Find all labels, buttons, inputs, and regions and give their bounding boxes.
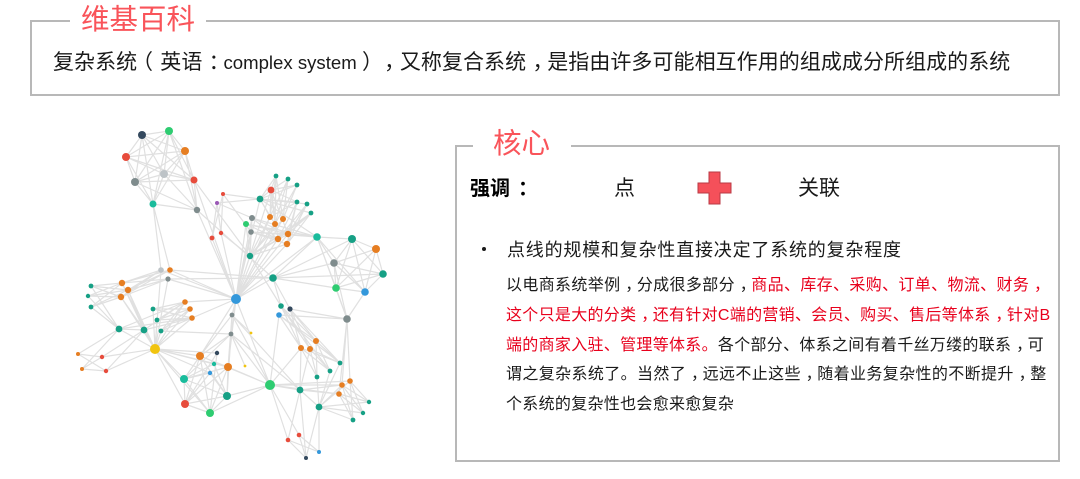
emphasis label: 强调 [470,178,510,200]
definition text: ） [362,51,383,74]
paragraph: e-commerce example: ， [740,277,756,294]
bullet [482,247,486,251]
paragraph: e-commerce example: 以电商系统举例 分成很多部分 商品、库存、采购、订单、物流、财务 [506,277,1029,294]
nodes: left cluster [76,267,195,373]
paragraph: e-commerce example: ， [1034,277,1050,294]
key point: 点线的规模和复杂性直接决定了系统的复杂程度 [507,240,902,260]
paragraph: e-commerce example: ， [806,366,822,383]
nodes: right cluster [313,233,387,323]
definition text: 复杂系统 英语 complex system 又称复合系统 是指由许多可能相互作用的组成成分所组成的系统 [53,51,1010,74]
definition text: ： [209,51,230,74]
definition text: ， [532,51,554,74]
panel: core [455,145,1060,462]
paragraph: e-commerce example: 个系统的复杂性也会愈来愈复杂 [506,396,734,413]
emphasis label [470,178,538,200]
label: relation: 关联 [798,177,840,200]
paragraph: e-commerce example: 端的商家入驻、管理等体系。各个部分、体系之间有着千丝万缕的联系 可 [506,337,1044,354]
label: point: 点 [614,177,635,200]
paragraph: e-commerce example: ， [1016,337,1032,354]
nodes: center and bottom clusters [180,294,371,460]
nodes: top-left cluster [122,127,225,240]
heading: core: 核心 [493,128,550,160]
paragraph: e-commerce example: ， [1019,366,1035,383]
paragraph: e-commerce example: ， [641,307,658,324]
paragraph: e-commerce example: ， [691,366,707,383]
nodes: top-middle cluster [243,174,313,282]
panel: wikipedia definition [30,20,1060,96]
emphasis label: ： [518,178,538,200]
network graph [76,127,387,460]
paragraph: e-commerce example: ， [625,277,642,294]
icon: plus [698,172,732,204]
paragraph: e-commerce example: 这个只是大的分类 还有针对C端的营销、会员、购买、售后等体系 针对B [506,307,1050,324]
heading: wikipedia: 维基百科 [81,4,195,36]
definition text: ， [384,51,405,74]
paragraph: e-commerce example: ， [995,307,1012,324]
paragraph: e-commerce example: 谓之复杂系统了。当然了 远远不止这些 随着业务复杂性的不断提升 整 [506,366,1047,383]
definition text: （ [132,51,153,74]
